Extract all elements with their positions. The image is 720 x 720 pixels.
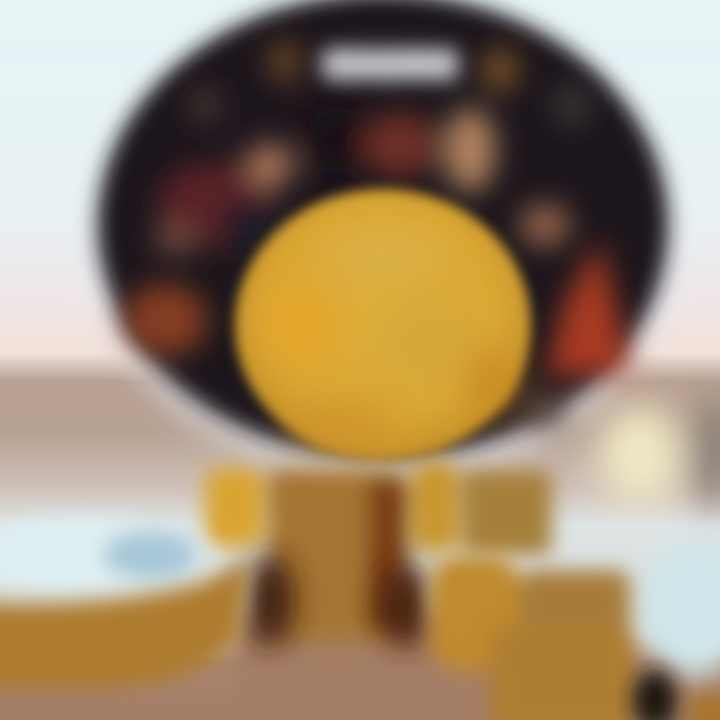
coin stacks: rear row [205,462,552,640]
background: pale right side glow [598,400,720,510]
coin: bottom right corner [690,695,720,720]
left dish: gold rim [0,560,250,688]
coin stacks: front right [430,555,635,720]
medallion: pale rim [91,0,675,480]
medallion: title text blob: Gold [320,42,460,89]
left dish: pale blue [0,519,210,591]
medallion: red figure [545,240,632,378]
table foreground under stacks [235,615,525,720]
dark shadow bottom right [633,670,677,720]
medallion: dark disc [98,0,668,457]
dark gap between stacks [246,554,431,647]
medallion: title text blob [320,42,460,89]
right pale blue area [645,542,720,678]
large gold coin [235,189,531,461]
medallion: blurred figures [123,40,590,428]
